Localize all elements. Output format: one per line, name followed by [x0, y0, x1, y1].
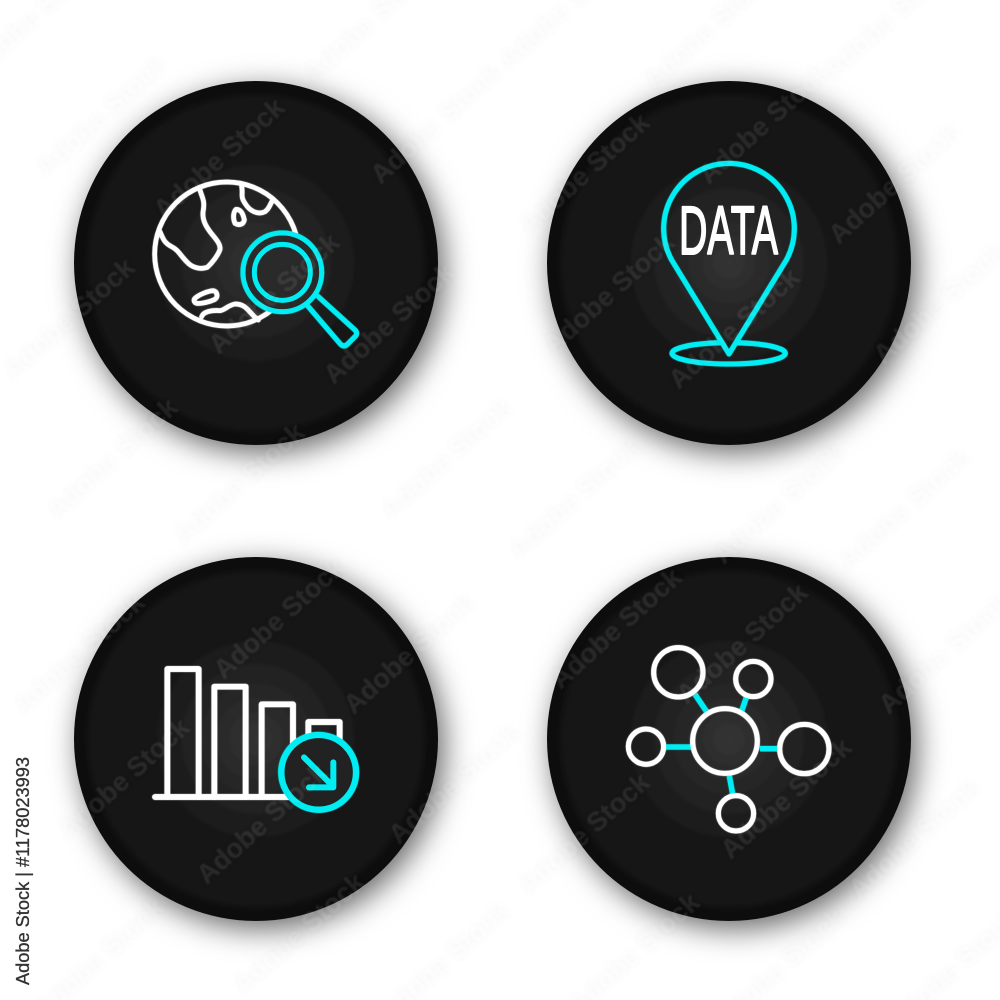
watermark pattern: Adobe Stock	[513, 766, 656, 900]
watermark pattern: Adobe Stock	[365, 56, 508, 190]
watermark pattern: Adobe Stock	[375, 391, 518, 525]
watermark pattern: Adobe Stock	[671, 576, 814, 710]
watermark pattern: Adobe Stock	[8, 586, 151, 720]
badge disc: network	[547, 557, 911, 921]
watermark pattern: Adobe Stock	[823, 116, 966, 250]
watermark pattern: Adobe Stock	[843, 771, 986, 905]
stock id caption: Adobe Stock | #1178023993	[13, 757, 33, 985]
watermark pattern: Adobe Stock	[208, 551, 351, 685]
panel: falling bar chart badge	[74, 557, 438, 921]
watermark pattern: Adobe Stock	[53, 711, 196, 845]
down arrow in circle	[281, 735, 356, 810]
watermark pattern: Adobe Stock	[191, 756, 334, 890]
label: DATA: DATA	[679, 192, 778, 269]
badge disc: pin	[547, 81, 911, 445]
watermark pattern: Adobe Stock	[228, 866, 371, 1000]
watermark pattern: Adobe Stock	[383, 716, 526, 850]
watermark pattern: Adobe Stock	[168, 416, 311, 550]
pin outline	[664, 163, 794, 354]
connectors	[665, 694, 778, 794]
watermark pattern: Adobe Stock	[715, 731, 858, 865]
icon: falling bar chart with arrow	[155, 669, 356, 810]
watermark pattern: Adobe Stock	[663, 261, 806, 395]
panel: network nodes badge	[547, 557, 911, 921]
badge disc: chart	[74, 557, 438, 921]
icon: hub and spoke network	[628, 648, 829, 831]
watermark pattern: Adobe Stock	[513, 106, 656, 240]
watermark pattern: Adobe Stock	[545, 561, 688, 695]
watermark pattern: Adobe Stock	[338, 586, 481, 720]
panel: data location pin badge	[547, 81, 911, 445]
ground ellipse	[672, 343, 785, 364]
watermark pattern: Adobe Stock	[148, 91, 291, 225]
watermark pattern: Adobe Stock	[538, 226, 681, 360]
watermark pattern: Adobe Stock	[693, 56, 836, 190]
watermark pattern: Adobe Stock	[503, 431, 646, 565]
magnifier	[243, 233, 357, 346]
bars and baseline	[155, 669, 340, 797]
watermark pattern: Adobe Stock	[318, 256, 461, 390]
nodes	[628, 648, 829, 831]
globe outline and continents	[155, 182, 299, 326]
watermark pattern: Adobe Stock	[833, 441, 976, 575]
icon: map pin with ground ellipse	[664, 163, 794, 364]
watermark pattern: Adobe Stock	[0, 251, 141, 385]
watermark pattern: Adobe Stock	[708, 436, 851, 570]
watermark pattern: Adobe Stock	[30, 48, 173, 182]
icon: globe with magnifier	[155, 182, 357, 346]
watermark pattern: Adobe Stock	[41, 391, 184, 525]
panel: globe search badge	[74, 81, 438, 445]
badge disc: globe	[74, 81, 438, 445]
watermark pattern: Adobe Stock	[203, 226, 346, 360]
